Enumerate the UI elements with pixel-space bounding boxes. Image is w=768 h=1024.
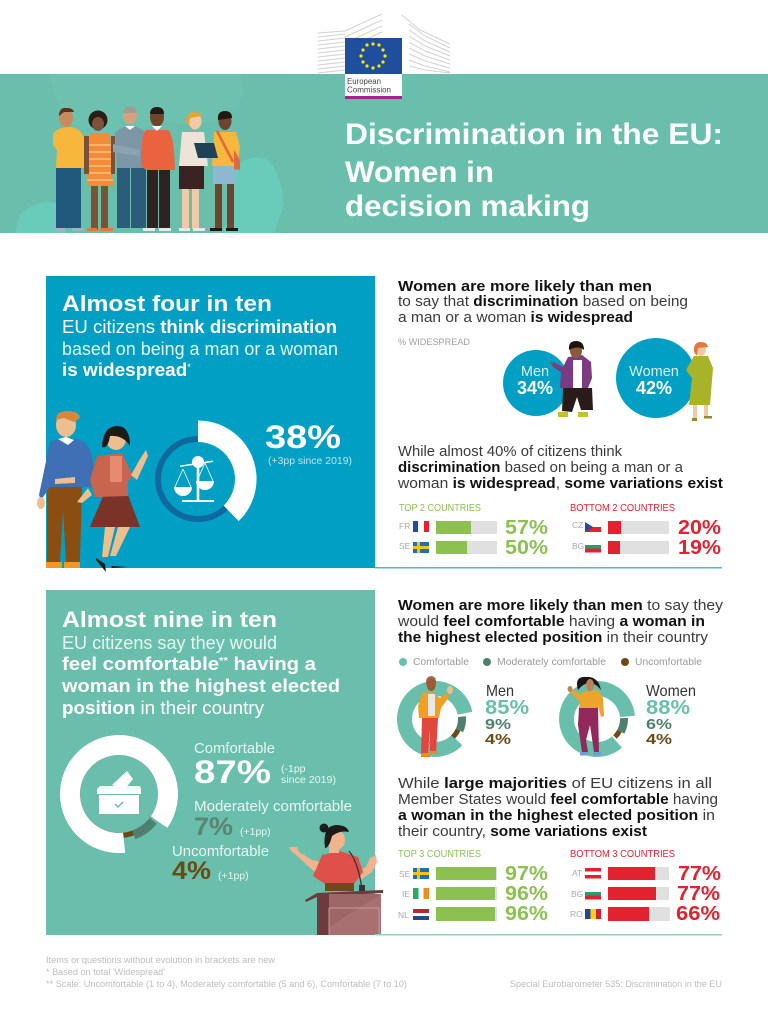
panel: almost four in ten — [37, 276, 375, 572]
person: woman with red bag — [210, 111, 240, 231]
row: Austria 77%: 77% — [678, 863, 721, 885]
row: France 57% — [399, 517, 548, 539]
text block: based on being a man or a woman — [62, 339, 338, 359]
values: men: 85% — [485, 697, 529, 719]
text block: large majorities: their country, some variations exist — [398, 824, 647, 840]
bubble: women 42%: 42% — [636, 378, 672, 398]
text block: feel comfortable — [62, 654, 201, 674]
panel: almost nine in ten — [46, 590, 383, 935]
row: Sweden 97%: SE — [399, 869, 411, 879]
legend — [399, 656, 702, 668]
chart: bottom 2 countries: BOTTOM 2 COUNTRIES — [570, 503, 675, 514]
source: Special Eurobarometer 535: Discrimination in the EU — [510, 979, 722, 989]
text block: woman in the highest elected — [61, 676, 340, 696]
row: Czechia 20%: 20% — [678, 517, 721, 539]
bubble: men 34%: 34% — [517, 378, 553, 398]
icon: scales — [174, 456, 214, 502]
chart: bottom 3 countries: BOTTOM 3 COUNTRIES — [570, 849, 675, 860]
European Commission logo: Commission — [347, 86, 391, 94]
row: Netherlands 96% — [398, 903, 548, 925]
row: Bulgaria 19%: 19% — [678, 537, 721, 559]
section heading: feel comfortable: the highest elected position in their country — [398, 630, 709, 646]
text block: EU citizens think discrimination — [62, 317, 337, 337]
title: decision making — [345, 190, 590, 223]
footnotes: ** Scale: Uncomfortable (1 to 4), Moderately comfortable (5 and 6), Comfortable (7 to 10) — [46, 979, 407, 989]
footnotes: * Based on total 'Widespread' — [46, 967, 165, 977]
values: women: Women — [646, 683, 696, 700]
text block: large majorities: While large majorities of EU citizens in all — [398, 776, 712, 792]
text block: large majorities: Member States would feel comfortable having — [398, 792, 718, 808]
row: Ireland 96%: 96% — [505, 883, 548, 905]
row: Bulgaria 19%: BG — [572, 541, 584, 551]
text block: EU citizens say they would — [62, 633, 277, 653]
value: 38%: (+3pp since 2019) — [268, 455, 352, 467]
donut chart: women — [559, 681, 635, 757]
row: France 57%: FR — [399, 521, 410, 531]
row: Sweden 50% — [399, 537, 548, 559]
text block — [61, 633, 340, 718]
illustration: man in orange jacket — [418, 676, 453, 757]
chart: bottom 2 countries — [570, 503, 721, 559]
row: Bulgaria 77% — [571, 883, 720, 905]
row: Sweden 97% — [399, 863, 548, 885]
row: France 57%: 57% — [505, 517, 548, 539]
section heading: feel comfortable: Women are more likely than men to say they — [398, 598, 724, 614]
section heading: women more likely, widespread: to say that discrimination based on being — [398, 294, 688, 310]
European Commission logo: European — [347, 77, 381, 86]
legend value: moderately comfortable 7%: Moderately comfortable — [194, 798, 352, 815]
text block: position in their country — [62, 698, 264, 718]
European Commission logo — [345, 38, 402, 99]
value: 38%: 38% — [265, 419, 341, 455]
text block: variations exist: woman is widespread , some variations exist — [397, 476, 723, 492]
legend value: moderately comfortable 7%: 7% — [194, 813, 233, 841]
chart: top 3 countries: TOP 3 COUNTRIES — [398, 849, 481, 860]
legend value: moderately comfortable 7%: (+1pp) — [240, 826, 271, 838]
legend value: comfortable 87%: Comfortable — [194, 740, 275, 757]
row: Bulgaria 77%: 77% — [677, 883, 720, 905]
text block: is widespread — [62, 360, 181, 380]
chart: top 2 countries: TOP 2 COUNTRIES — [399, 503, 481, 514]
values: men — [485, 683, 529, 748]
illustration: man in blue sweater — [37, 411, 94, 568]
legend value: uncomfortable 4%: Uncomfortable — [172, 843, 269, 860]
donut chart: 38% — [158, 420, 257, 521]
row: Romania 66% — [570, 903, 720, 925]
title: Women in — [345, 156, 494, 189]
illustration: woman in coral cardigan — [77, 426, 148, 572]
chart: top 3 countries — [398, 849, 548, 925]
person: man in red check shirt — [141, 107, 175, 231]
person: man in yellow sweater — [53, 108, 86, 231]
chart label: % widespread: % WIDESPREAD — [398, 337, 470, 348]
donut chart: 87 / 7 / 4 — [60, 735, 178, 853]
title: Discrimination in the EU: — [345, 118, 723, 151]
row: Netherlands 96%: 96% — [505, 903, 548, 925]
values: women: 88% — [646, 697, 690, 719]
title — [345, 118, 723, 223]
row: Bulgaria 19% — [572, 537, 721, 559]
values: men: Men — [486, 683, 514, 700]
legend value: comfortable 87%: (-1pp — [281, 763, 306, 775]
row: Sweden 50%: SE — [399, 541, 411, 551]
text block: ** — [219, 656, 228, 667]
row: Bulgaria 77%: BG — [571, 889, 583, 899]
section heading: feel comfortable — [397, 598, 724, 646]
section heading: women more likely, widespread — [398, 279, 688, 326]
person: woman in orange dress — [84, 110, 115, 231]
values: men: 9% — [485, 717, 511, 733]
text block: having a — [228, 654, 317, 674]
values: men: 4% — [485, 732, 511, 748]
donut chart: men — [397, 681, 472, 757]
section heading: feel comfortable: would feel comfortable having a woman in — [397, 614, 705, 630]
row: Czechia 20% — [572, 517, 721, 539]
person: woman with laptop — [179, 112, 208, 231]
bubble: men 34% — [503, 350, 569, 416]
row: Romania 66%: RO — [570, 909, 583, 919]
legend value: uncomfortable 4%: 4% — [172, 857, 211, 885]
legend value: moderately comfortable 7% — [194, 798, 352, 841]
legend: Comfortable — [413, 656, 469, 668]
legend value: comfortable 87%: 87% — [194, 754, 271, 790]
row: Austria 77% — [572, 863, 721, 885]
row: Sweden 97%: 97% — [505, 863, 548, 885]
legend value: comfortable 87% — [194, 740, 336, 790]
bubble: men 34%: Men — [521, 364, 549, 380]
legend: Uncomfortable — [635, 656, 702, 668]
icon: laptop — [194, 143, 218, 158]
text block: variations exist: While almost 40% of citizens think — [398, 444, 623, 460]
row: Romania 66%: 66% — [676, 903, 720, 925]
person: grey-haired man — [113, 106, 146, 228]
row: Ireland 96% — [402, 883, 548, 905]
row: Netherlands 96%: NL — [398, 910, 409, 920]
row: Sweden 50%: 50% — [505, 537, 548, 559]
text block: * — [187, 362, 192, 372]
Berlaymont building logo backdrop — [318, 14, 450, 73]
header band — [0, 74, 768, 233]
section heading: women more likely, widespread: a man or a woman is widespread — [398, 310, 633, 326]
legend value: uncomfortable 4% — [172, 843, 269, 885]
chart: bottom 3 countries — [570, 849, 721, 925]
text block — [62, 317, 338, 380]
footnotes — [46, 955, 407, 989]
heading: Almost four in ten — [62, 291, 272, 316]
legend: Moderately comfortable — [497, 656, 606, 668]
row: Ireland 96%: IE — [402, 889, 410, 899]
illustration: woman in green dress — [686, 342, 713, 421]
bubble: women 42% — [616, 338, 696, 418]
text block: large majorities: a woman in the highest elected position in — [398, 808, 715, 824]
illustration: group of six people — [53, 106, 240, 231]
illustration: man in purple jacket — [549, 341, 593, 417]
value: 38% — [265, 419, 352, 467]
heading: Almost nine in ten — [62, 607, 277, 632]
legend value: uncomfortable 4%: (+1pp) — [218, 870, 249, 882]
row: Austria 77%: AT — [572, 868, 582, 878]
values: women: 6% — [646, 717, 672, 733]
footnotes: Items or questions without evolution in brackets are new — [46, 955, 276, 965]
chart: top 2 countries — [399, 503, 548, 559]
text block: variations exist — [397, 444, 723, 492]
text block: variations exist: discrimination based on being a man or a — [398, 460, 684, 476]
values: women — [646, 683, 696, 748]
illustration: woman in mustard top — [568, 677, 604, 756]
bubble: women 42%: Women — [629, 364, 679, 380]
row: Czechia 20%: CZ — [572, 520, 583, 530]
section heading: women more likely, widespread: Women are more likely than men — [398, 279, 652, 295]
text block: large majorities — [398, 776, 718, 840]
values: women: 4% — [646, 732, 672, 748]
legend value: comfortable 87%: since 2019) — [281, 774, 336, 786]
icon: ballot box — [97, 771, 141, 814]
illustration: woman speaking at podium — [289, 824, 383, 935]
